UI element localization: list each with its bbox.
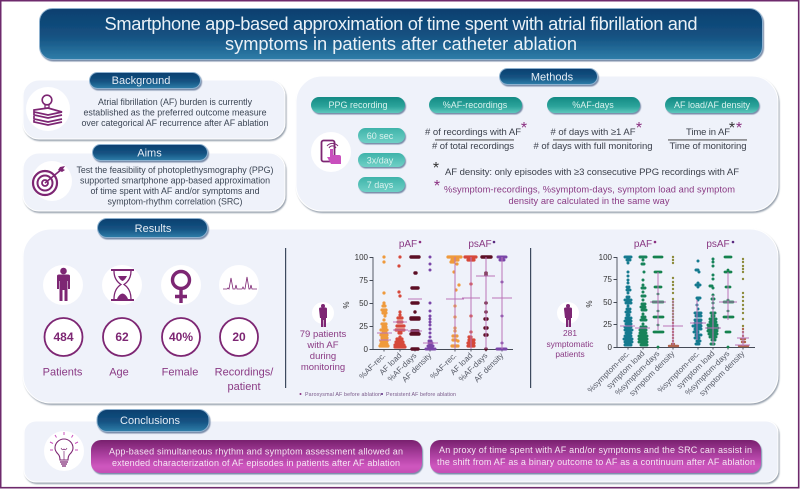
panel: background <box>23 80 285 139</box>
stat: recordings per patient <box>215 265 274 393</box>
stat: female: 40% <box>169 330 193 344</box>
patient group: 281 symptomatic <box>546 302 594 359</box>
x-axis labels: symptom density <box>628 349 676 398</box>
background text: Atrial fibrillation (AF) burden is currently <box>98 97 253 107</box>
heading: conclusions <box>97 410 209 432</box>
aims text: supported smartphone app-based approximation <box>80 176 270 186</box>
icon: light bulb <box>44 431 84 471</box>
duration pills: 7 days <box>367 180 394 190</box>
chart titles: psAF <box>706 239 730 250</box>
formula: AF recordings: # of recordings with AF <box>425 127 521 138</box>
chart: symptom measures dot plot: 25 <box>603 320 613 329</box>
aims text: of time spent with AF and/or symptoms and <box>90 186 260 196</box>
chart titles <box>634 239 734 250</box>
patient group: 281 symptomatic: symptomatic <box>546 339 594 349</box>
conclusion box left: extended characterization of AF episodes in patients after AF ablation <box>112 458 400 468</box>
formula: AF days: # of days with full monitoring <box>534 141 652 152</box>
axes <box>614 257 755 350</box>
dots: AF days <box>411 257 491 349</box>
formula: AF recordings: # of total recordings <box>432 141 514 152</box>
stat: female: Female <box>162 366 198 378</box>
title banner: Smartphone app-based approximation of time spent with atrial fibrillation and <box>104 13 698 34</box>
chart: symptom measures dot plot: 75 <box>603 275 613 284</box>
dots: symptom days <box>653 257 733 347</box>
patient group: 79 with AF: monitoring <box>301 362 345 373</box>
chart: AF measures dot plot: 50 <box>359 299 369 308</box>
chart titles: psAF <box>468 239 492 250</box>
formula: AF load and density: * <box>729 120 735 137</box>
conclusion box right <box>430 440 761 473</box>
formula: AF days: # of days with ≥1 AF <box>550 127 636 138</box>
panel: results <box>23 229 778 403</box>
x-axis labels: %symptom-rec. <box>656 349 701 395</box>
conclusion box right: An proxy of time spent with AF and/or symptoms and the SRC can assist in <box>439 445 752 455</box>
PPG recording pill: PPG recording <box>328 100 388 110</box>
dots: AF recordings <box>380 257 461 346</box>
panel: aims <box>23 153 285 211</box>
dots: symptom density <box>673 257 743 326</box>
stat: recordings per patient: patient <box>227 381 261 393</box>
chart: AF measures dot plot: % <box>342 301 351 309</box>
icon: books and light bulb <box>26 87 70 131</box>
chart: AF measures dot plot: 75 <box>359 276 369 285</box>
axes <box>370 257 513 352</box>
whiskers and medians <box>377 257 512 349</box>
patient group: 79 with AF <box>300 302 346 373</box>
stat: age <box>102 265 142 378</box>
conclusion box right: the shift from AF as a binary outcome to AF as a continuum after AF ablation <box>437 457 755 467</box>
%AF-days pill <box>547 97 640 113</box>
formula: AF load and density: * <box>736 120 742 137</box>
background text: over categorical AF recurrence after AF ablation <box>82 118 269 128</box>
conclusion box left <box>91 440 422 473</box>
AF density note: * <box>433 160 439 177</box>
formula: AF load and density <box>668 120 747 152</box>
legend: Persistent AF before ablation <box>386 392 456 398</box>
duration pills: 60 sec <box>367 131 394 141</box>
AF load/AF density pill: AF load/AF density <box>674 100 751 110</box>
chart titles: pAF <box>634 239 652 250</box>
duration pills <box>358 128 405 192</box>
patient group: 79 with AF: with AF <box>306 340 339 351</box>
x-axis labels: AF load <box>449 351 474 377</box>
x-axis labels: %AF-days <box>386 351 418 384</box>
chart titles: pAF <box>399 239 417 250</box>
formula: AF days <box>534 120 652 152</box>
whiskers and medians <box>620 272 750 346</box>
heading: results <box>98 218 208 238</box>
heading: aims <box>92 144 208 160</box>
panel: methods <box>296 76 778 211</box>
symptom note: %symptom-recordings, %symptom-days, symptom load and symptom <box>444 184 735 194</box>
x-axis labels: %AF-rec. <box>357 351 387 381</box>
PPG recording pill <box>311 97 405 113</box>
x-axis labels: symptom load <box>605 349 646 391</box>
x-axis labels: %symptom-days <box>683 349 731 397</box>
background text: established as the preferred outcome measure <box>84 108 267 118</box>
background text <box>82 97 269 128</box>
chart titles <box>399 239 495 250</box>
chart: AF measures dot plot <box>342 239 513 384</box>
x-axis labels: AF density <box>472 351 505 384</box>
%AF-recordings pill <box>429 97 522 113</box>
duration pills: 3x/day <box>367 156 394 166</box>
aims text <box>76 165 274 206</box>
stat: female <box>161 265 201 378</box>
chart: symptom measures dot plot <box>585 239 755 398</box>
%AF-recordings pill: %AF-recordings <box>443 100 508 110</box>
chart: symptom measures dot plot: 50 <box>603 298 613 307</box>
x-axis labels: symptom density <box>698 349 746 398</box>
x-axis labels: %symptom-days <box>613 349 661 397</box>
chart: symptom measures dot plot: % <box>585 300 594 308</box>
formula: AF recordings <box>425 120 527 152</box>
x-axis labels: symptom load <box>675 349 716 391</box>
patient group: 281 symptomatic: 281 <box>563 328 577 338</box>
x-axis labels: %AF-days <box>457 351 489 384</box>
stat: patients: 484 <box>53 330 74 344</box>
title banner: symptoms in patients after catheter ablation <box>225 33 577 54</box>
%AF-days pill: %AF-days <box>572 100 614 110</box>
legend <box>300 392 456 398</box>
title banner <box>40 8 762 60</box>
stat: age: Age <box>109 366 129 378</box>
icon: phone with touch <box>311 132 351 172</box>
heading: methods: Methods <box>531 72 574 84</box>
chart: AF measures dot plot: 25 <box>359 322 369 331</box>
formula: AF days: * <box>636 120 642 137</box>
patient group: 79 with AF: 79 patients <box>300 329 346 340</box>
panel: conclusions <box>24 421 778 482</box>
heading: aims: Aims <box>137 148 162 160</box>
chart: symptom measures dot plot: 100 <box>599 253 613 262</box>
stat: age: 62 <box>115 330 129 344</box>
AF load/AF density pill <box>665 97 759 113</box>
x-axis labels: %symptom-rec. <box>586 349 631 395</box>
stat: patients <box>43 265 83 378</box>
symptom note <box>434 178 735 206</box>
dots: symptom recordings <box>624 257 701 345</box>
x-axis labels: AF load <box>378 351 403 377</box>
aims text: Test the feasibility of photoplethysmography (PPG) <box>76 165 274 175</box>
formula: AF load and density: Time of monitoring <box>670 141 746 152</box>
icon: target <box>32 161 72 201</box>
formula: AF load and density: Time in AF <box>686 127 730 138</box>
dots: AF density <box>426 257 506 349</box>
symptom note: * <box>434 178 440 195</box>
stat: patients: Patients <box>43 366 83 378</box>
conclusion box left: App-based simultaneous rhythm and symptom assessment allowed an <box>109 446 403 456</box>
x-axis labels: %AF-rec. <box>428 351 458 381</box>
dots: symptom load <box>639 257 718 345</box>
chart: AF measures dot plot: 100 <box>355 253 369 262</box>
chart: AF measures dot plot: 0 <box>364 345 369 354</box>
heading: background: Background <box>112 75 170 87</box>
stat: recordings per patient: Recordings/ <box>215 366 274 378</box>
stat: recordings per patient: 20 <box>232 330 246 344</box>
heading: results: Results <box>135 223 172 235</box>
legend: Paroxysmal AF before ablation <box>305 392 381 398</box>
dots: AF load <box>395 257 476 347</box>
patient group: 79 with AF: during <box>310 351 336 362</box>
heading: background <box>90 72 200 88</box>
chart: symptom measures dot plot: 0 <box>608 343 613 352</box>
x-axis labels: AF density <box>400 351 433 384</box>
formula: AF recordings: * <box>521 120 527 137</box>
heading: methods <box>500 68 598 84</box>
AF density note: AF density: only episodes with ≥3 consecutive PPG recordings with AF <box>445 167 739 178</box>
x-axis labels <box>586 349 746 398</box>
patient group: 281 symptomatic: patients <box>555 349 585 359</box>
symptom note: density are calculated in the same way <box>508 196 670 206</box>
aims text: symptom-rhythm correlation (SRC) <box>108 196 243 206</box>
AF density note <box>433 160 739 178</box>
x-axis labels <box>357 351 505 384</box>
heading: conclusions: Conclusions <box>120 415 180 427</box>
